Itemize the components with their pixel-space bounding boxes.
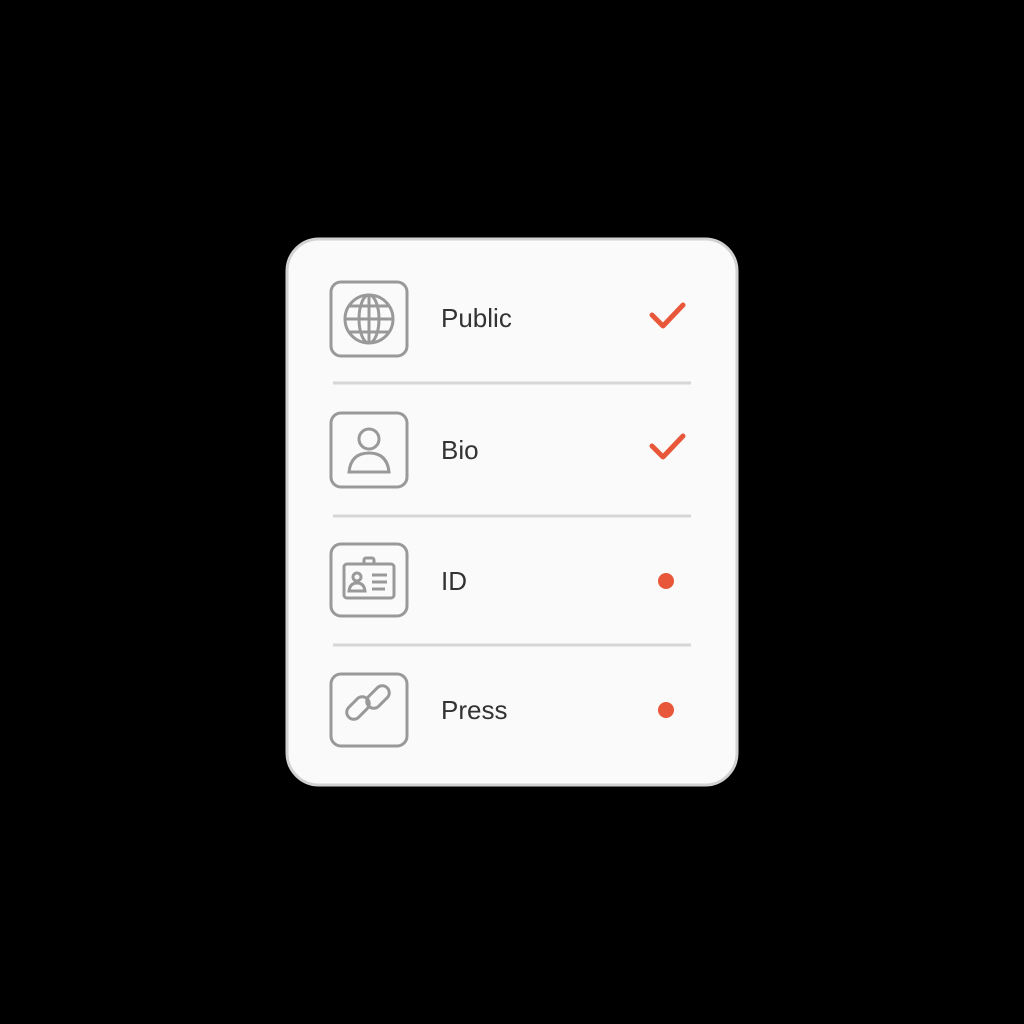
- icon: person: [331, 413, 407, 487]
- label: Press: Press: [441, 695, 507, 725]
- row: Bio: [331, 413, 683, 487]
- icon: dot: [658, 702, 674, 718]
- icon: id badge: [331, 544, 407, 616]
- icon: check: [652, 436, 683, 457]
- icon: dot: [658, 573, 674, 589]
- icon: check: [652, 305, 683, 326]
- row: ID: [331, 544, 674, 616]
- panel: checklist card: [287, 239, 737, 785]
- label: ID: ID: [441, 566, 467, 596]
- icon: globe: [331, 282, 407, 356]
- row: Public: [331, 282, 683, 356]
- label: Bio: Bio: [441, 435, 479, 465]
- label: Public: Public: [441, 303, 512, 333]
- row: Press: [331, 674, 674, 746]
- icon: link: [331, 674, 407, 746]
